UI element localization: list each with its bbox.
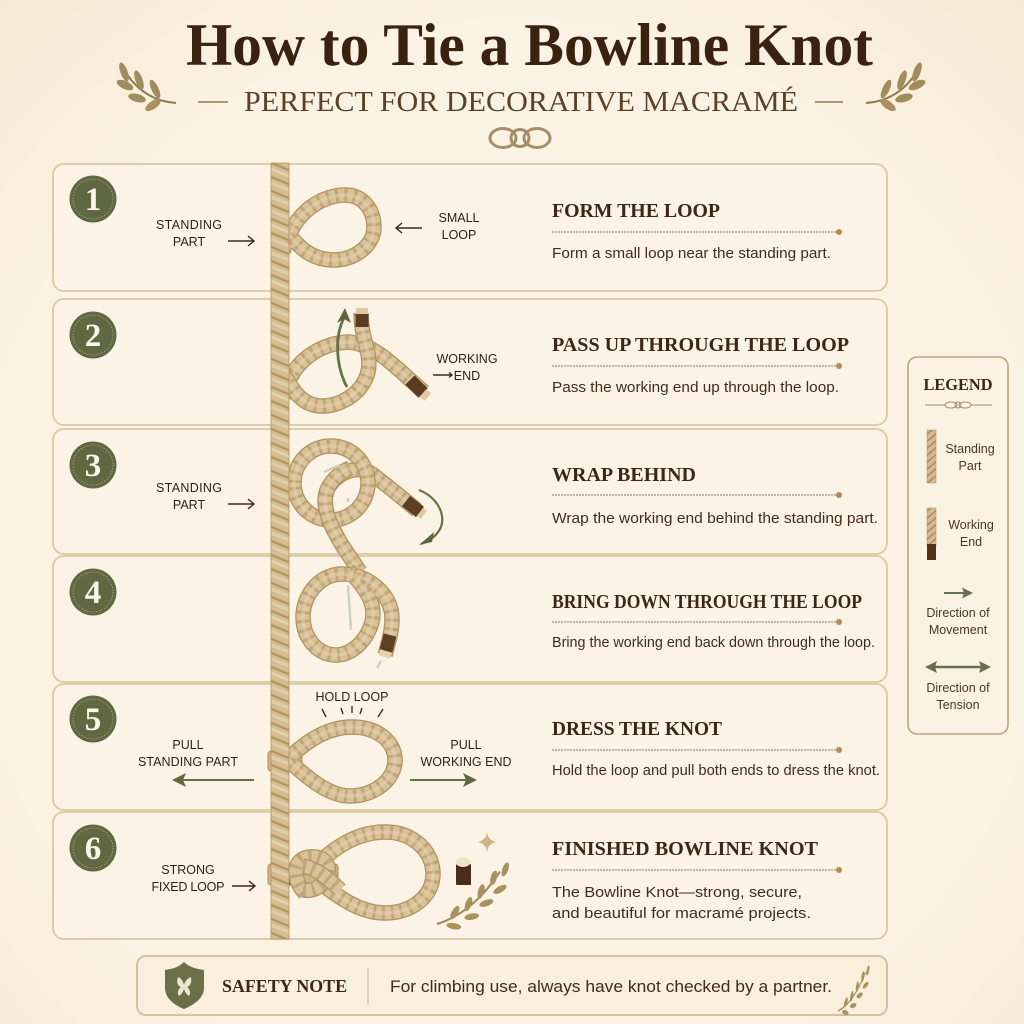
step number 4: 4 [85, 575, 101, 611]
icon: decorative sprig [437, 861, 511, 930]
step number 5: 5 [85, 702, 101, 738]
panel: step 4 [53, 556, 887, 682]
rope: standing part [271, 163, 289, 939]
label: standing part: PART [173, 498, 205, 512]
step number 1 [70, 176, 116, 222]
label: hold loop: HOLD LOOP [316, 690, 388, 704]
description [552, 885, 811, 922]
icon: right laurel sprig [866, 61, 927, 113]
legend: direction of tension [925, 661, 991, 712]
divider [367, 968, 369, 1004]
panel: step 2 [53, 299, 887, 425]
arrow: step 2 upward movement [337, 308, 351, 387]
label: strong fixed loop [152, 863, 255, 894]
panel: legend [908, 357, 1008, 734]
underline [552, 867, 842, 873]
underline [552, 492, 842, 498]
description: Pass the working end up through the loop. [552, 380, 839, 396]
label: strong fixed loop: FIXED LOOP [152, 880, 224, 894]
legend: standing part: Standing [945, 442, 995, 456]
underline [552, 747, 842, 753]
panel: safety note [137, 956, 887, 1016]
description: Bring the working end back down through the loop. [552, 635, 875, 651]
step number 4 [70, 568, 116, 616]
rope: step 6 knot ball [296, 857, 340, 893]
legend ornament [925, 402, 992, 408]
icon: sprig [838, 965, 870, 1016]
rope: step 2 knot [283, 308, 428, 406]
rope: step 2 upward strand [283, 313, 369, 406]
heading: BRING DOWN THROUGH THE LOOP [552, 591, 862, 613]
legend title: LEGEND [924, 375, 993, 394]
panel: step 5 [53, 684, 887, 810]
step number 1: 1 [85, 182, 101, 218]
rope: step 4 loop [303, 570, 392, 655]
panel: step 3 [53, 429, 887, 554]
label: working end [433, 352, 498, 383]
label: pull working end [410, 738, 512, 787]
description: The Bowline Knot—strong, secure, [552, 885, 802, 901]
icon: star [478, 832, 496, 852]
underline [552, 363, 842, 369]
rope end: loose end [456, 857, 471, 885]
arrow: faint direction hints [324, 465, 381, 668]
description: Wrap the working end behind the standing part. [552, 511, 878, 527]
panel: step 1 [53, 164, 887, 291]
step number 3: 3 [85, 448, 101, 484]
icon: shield [165, 962, 204, 1009]
rope: step 2 loop and working end [283, 342, 424, 398]
label: small loop: LOOP [442, 228, 476, 242]
label: hold loop [316, 690, 388, 717]
rope tip: step 4 end [384, 635, 390, 657]
rope: step 3 strand over loop [325, 468, 360, 572]
safety heading: SAFETY NOTE [222, 976, 347, 996]
label: working end: WORKING [436, 352, 498, 366]
label: pull standing part [138, 738, 254, 787]
rope: step 3 and 4 knot [294, 446, 424, 657]
step number 6 [70, 824, 116, 872]
icon: knot ornament [490, 128, 550, 148]
step number 5 [70, 696, 116, 742]
description: Hold the loop and pull both ends to dress the knot. [552, 763, 880, 779]
legend: working end: End [960, 535, 982, 549]
rope tip: step 2 right end [410, 380, 428, 397]
legend: working end [927, 508, 994, 560]
heading: DRESS THE KNOT [552, 718, 723, 740]
step number 2: 2 [85, 318, 101, 354]
rope: step 3 big loop [294, 446, 368, 520]
heading: FORM THE LOOP [552, 200, 720, 222]
step number 3 [70, 442, 116, 488]
rope: step 5 wrap nub [268, 751, 302, 771]
rope: step 6 wrap nub [268, 864, 338, 885]
legend: direction of movement [926, 588, 990, 637]
label: standing part: STANDING [156, 218, 222, 232]
description: and beautiful for macramé projects. [552, 906, 811, 922]
heading: WRAP BEHIND [552, 464, 696, 486]
rope: step 3 working strand tail [325, 470, 417, 572]
label: strong fixed loop: STRONG [161, 863, 215, 877]
label: pull working end: PULL [450, 738, 482, 752]
rope: step 5 loop [268, 727, 395, 796]
label: pull working end: WORKING END [420, 755, 512, 769]
step number 6: 6 [85, 831, 101, 867]
label: pull standing part: STANDING PART [138, 755, 238, 769]
legend: direction of movement: Movement [929, 623, 988, 637]
label: standing part: STANDING [156, 481, 222, 495]
rope: step 6 loop [316, 832, 433, 913]
rope: step 1 loop [283, 195, 374, 260]
legend: working end: Working [948, 518, 994, 532]
rope: step 5 teardrop [283, 727, 395, 796]
underline [552, 619, 842, 625]
legend: direction of tension: Direction of [926, 681, 990, 695]
label: working end: END [454, 369, 480, 383]
title: How to Tie a Bowline Knot [186, 12, 873, 78]
label: small loop: SMALL [438, 211, 480, 225]
label: standing part [156, 481, 254, 512]
legend: direction of movement: Direction of [926, 606, 990, 620]
step number 2 [70, 312, 116, 358]
arrow: step 3 wrap direction [419, 490, 442, 545]
legend: standing part: Part [959, 459, 982, 473]
panel: step 6 [53, 812, 887, 939]
rope tip: step 3 end [406, 501, 424, 515]
label: pull standing part: PULL [172, 738, 204, 752]
label: small loop [396, 211, 480, 242]
label: standing part: PART [173, 235, 205, 249]
description: Form a small loop near the standing part. [552, 246, 831, 262]
subtitle: PERFECT FOR DECORATIVE MACRAMÉ [244, 87, 798, 118]
subtitle dashes [198, 101, 843, 103]
rope: step 6 knot [268, 832, 433, 913]
label: standing part [156, 218, 254, 249]
rope tip: step 2 top end [356, 308, 368, 327]
underline [552, 229, 842, 235]
rope: step 6 dark binding [288, 864, 297, 885]
legend: standing part [927, 430, 995, 483]
heading: FINISHED BOWLINE KNOT [552, 838, 819, 860]
icon: left laurel sprig [115, 61, 176, 113]
header [115, 12, 927, 148]
legend: direction of tension: Tension [936, 698, 980, 712]
heading: PASS UP THROUGH THE LOOP [552, 334, 849, 356]
safety text: For climbing use, always have knot checked by a partner. [390, 977, 832, 996]
